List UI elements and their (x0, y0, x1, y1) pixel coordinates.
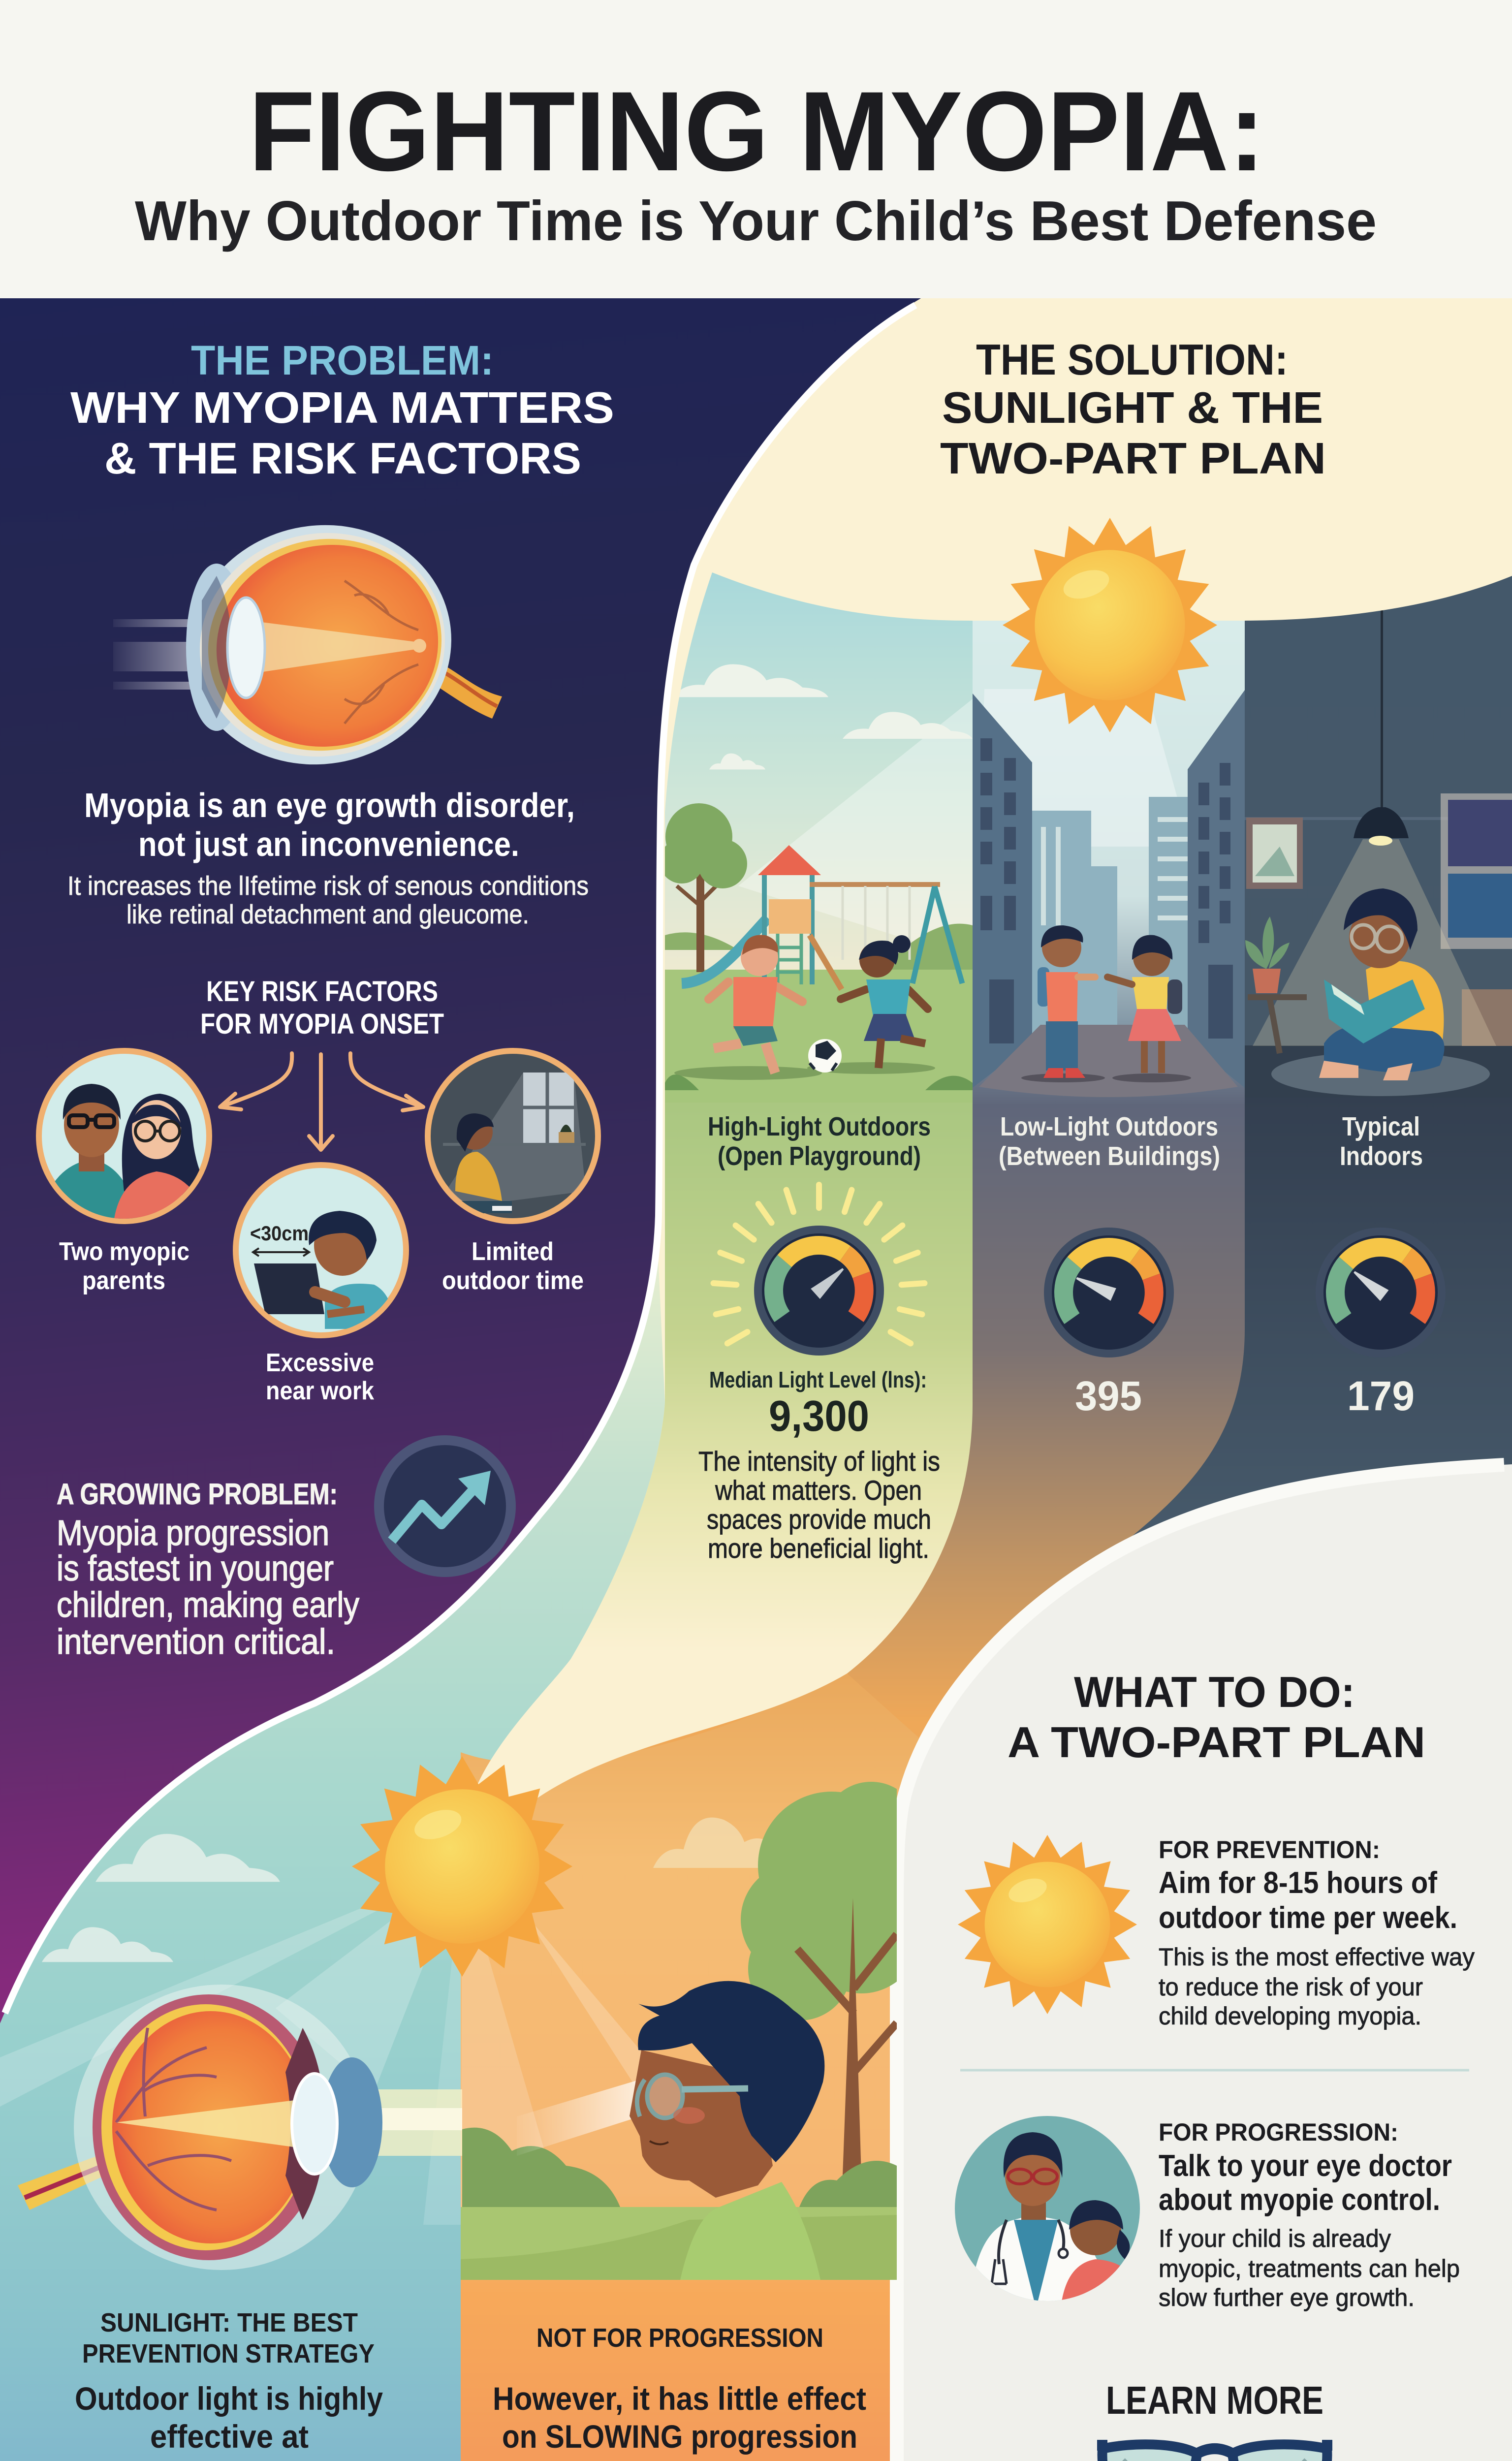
arrows to risk factors (220, 1053, 423, 1150)
icon: myopic eye diagram (113, 501, 502, 789)
growing problem text (57, 1478, 359, 1662)
icon: two myopic parents (39, 1051, 209, 1226)
progression panel text: NOT FOR PROGRESSION (536, 2323, 823, 2353)
prevention panel scene: sky, clouds and rays (0, 1834, 462, 2225)
dark problem panel (0, 298, 921, 2023)
problem statement (67, 786, 589, 929)
progression panel scene (461, 1782, 920, 2280)
low light value: 395 (1075, 1373, 1142, 1419)
risk factors heading (200, 976, 444, 1040)
prevention advice: outdoor time per week. (1159, 1901, 1457, 1935)
high light outdoors column background (472, 572, 973, 1831)
white action panel (768, 1464, 1512, 2461)
indoor scene (1244, 607, 1512, 1098)
low light outdoors column background (461, 621, 1245, 2018)
column two labels (999, 1112, 1220, 1171)
playground scene (660, 664, 973, 1103)
risk factor labels: parents (82, 1266, 165, 1295)
column three labels: Typical (1342, 1112, 1420, 1141)
icon: eye doctor and child (955, 2116, 1142, 2308)
boy with ball (709, 935, 842, 1073)
gauge: low light (1044, 1228, 1174, 1357)
progression advice: Talk to your eye doctor (1159, 2149, 1452, 2183)
column one labels: (Open Playground) (718, 1141, 921, 1171)
high light readout and note: The intensity of light is (698, 1446, 940, 1477)
icon: excessive near work (236, 1165, 406, 1335)
growing problem text: intervention critical. (57, 1622, 335, 1662)
icon: excessive near work: <30cm (250, 1222, 309, 1245)
progression advice (1159, 2118, 1460, 2311)
indoors value: 179 (1347, 1373, 1415, 1419)
icon: sun above columns (1003, 518, 1217, 732)
high light readout and note: what matters. Open (715, 1475, 922, 1506)
city scene (973, 689, 1245, 1097)
lower right orange panel (461, 1673, 935, 2461)
what to do heading: WHAT TO DO: (1074, 1668, 1355, 1716)
title (135, 68, 1377, 252)
what to do heading: A TWO-PART PLAN (1008, 1718, 1425, 1767)
what to do heading (1008, 1668, 1425, 1767)
high light readout and note: more beneficial light. (708, 1533, 929, 1564)
column three labels (1340, 1112, 1423, 1171)
prevention panel text (64, 2308, 394, 2461)
risk factor labels (59, 1237, 584, 1405)
girl playing (841, 935, 928, 1068)
high light readout and note (698, 1367, 940, 1564)
solution heading: SUNLIGHT & THE (942, 383, 1323, 433)
icon: healthy eye with sunlight (18, 1985, 462, 2270)
column two labels: Low-Light Outdoors (1000, 1112, 1218, 1141)
prevention panel text: effective at (150, 2418, 309, 2455)
growing problem text: children, making early (57, 1585, 359, 1625)
icon: rising trend (379, 1440, 511, 1572)
high light readout and note: 9,300 (769, 1391, 869, 1440)
column three labels: Indoors (1340, 1141, 1423, 1171)
growing problem text: is fastest in younger (57, 1549, 334, 1588)
gauge: indoors (1316, 1228, 1446, 1357)
solution heading: TWO-PART PLAN (940, 434, 1326, 483)
risk factor labels: near work (266, 1377, 374, 1405)
prevention advice (1159, 1836, 1475, 2030)
high light readout and note: Median Light Level (lns): (709, 1367, 927, 1392)
teal flow and lower left panel background (0, 1181, 665, 2461)
problem statement: It increases the lIfetime risk of senous conditions (67, 871, 589, 901)
column one labels: High-Light Outdoors (708, 1112, 931, 1141)
title: FIGHTING MYOPIA: (249, 68, 1265, 194)
learn more heading: LEARN MORE (1106, 2378, 1323, 2422)
problem statement: like retinal detachment and gleucome. (126, 900, 529, 929)
problem heading (70, 337, 614, 483)
child with glasses (630, 1981, 824, 2280)
icon: sun over lower panels (352, 1756, 572, 1977)
problem statement: not just an inconvenience. (138, 825, 519, 863)
icon: prevention sun (958, 1835, 1137, 2014)
prevention advice: This is the most effective way (1159, 1943, 1475, 1971)
problem heading: & THE RISK FACTORS (104, 434, 581, 483)
prevention panel text: PREVENTION STRATEGY (82, 2339, 375, 2368)
solution heading (940, 335, 1326, 483)
solution heading: THE SOLUTION: (976, 335, 1288, 384)
icon: glasses (1097, 2444, 1332, 2461)
child reading (1271, 888, 1490, 1096)
prevention advice: Aim for 8-15 hours of (1159, 1866, 1437, 1900)
problem heading: WHY MYOPIA MATTERS (70, 383, 614, 433)
progression advice: myopic, treatments can help (1159, 2255, 1460, 2282)
growing problem text: A GROWING PROBLEM: (57, 1478, 338, 1511)
risk factor labels: Limited (472, 1237, 554, 1266)
prevention advice: FOR PREVENTION: (1159, 1836, 1380, 1863)
prevention advice: child developing myopia. (1159, 2002, 1421, 2030)
column one labels (708, 1112, 931, 1171)
gauge: high light (714, 1185, 924, 1356)
growing problem text: Myopia progression (57, 1514, 329, 1553)
risk factors heading: KEY RISK FACTORS (206, 976, 438, 1008)
icon: limited outdoor time (428, 1051, 598, 1221)
progression advice: FOR PROGRESSION: (1159, 2118, 1398, 2146)
cream solution background (591, 298, 1512, 1775)
prevention panel text: Outdoor light is highly (75, 2380, 383, 2417)
progression advice: If your child is already (1159, 2225, 1391, 2252)
risk factor labels: Excessive (266, 1349, 374, 1377)
progression panel text (493, 2323, 866, 2461)
two children between buildings (1021, 925, 1191, 1082)
prevention advice: to reduce the risk of your (1159, 1973, 1423, 2001)
high light readout and note: spaces provide much (707, 1504, 931, 1535)
risk factors heading: FOR MYOPIA ONSET (200, 1008, 444, 1040)
progression advice: about myopie control. (1159, 2183, 1440, 2217)
column two labels: (Between Buildings) (999, 1141, 1220, 1171)
risk factor labels: outdoor time (442, 1266, 584, 1295)
prevention panel text: SUNLIGHT: THE BEST (100, 2308, 358, 2337)
title: Why Outdoor Time is Your Child’s Best Defense (135, 190, 1377, 252)
progression advice: slow further eye growth. (1159, 2284, 1415, 2311)
typical indoors column background (984, 576, 1512, 1673)
progression panel text: on SLOWING progression (502, 2418, 857, 2455)
progression panel text: However, it has little effect (493, 2380, 866, 2417)
problem statement: Myopia is an eye growth disorder, (84, 786, 575, 824)
problem heading: THE PROBLEM: (191, 337, 494, 383)
risk factor labels: Two myopic (59, 1237, 189, 1266)
